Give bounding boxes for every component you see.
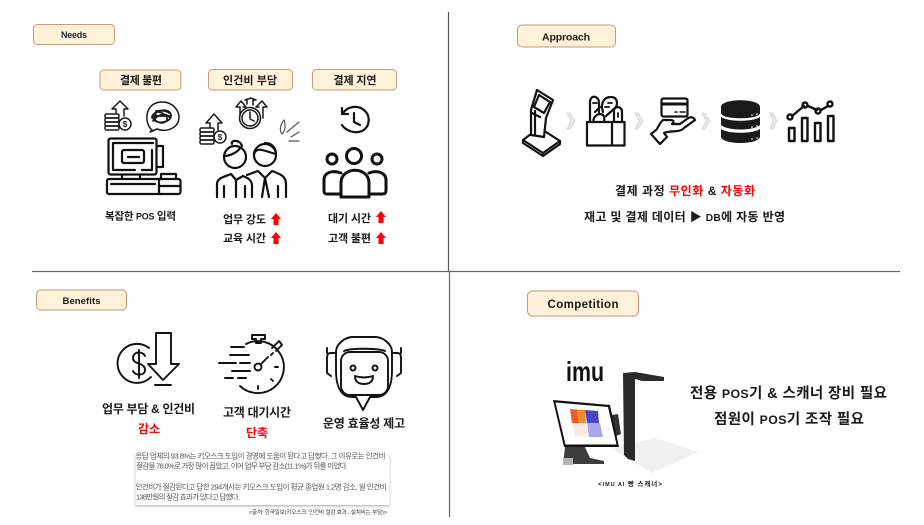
photo: IMU POS and scanner bbox=[553, 372, 699, 473]
label: payment inconvenience: 결제 불편 bbox=[120, 73, 162, 87]
icon: three people group bbox=[324, 148, 386, 197]
icon: stress lines bbox=[280, 120, 299, 141]
icon: speech bubble with scribble bbox=[147, 102, 179, 132]
text: data reflected in DB: 재고 및 결제 데이터 ▶ DB에 자동 반영 bbox=[584, 209, 785, 224]
label: payment inconvenience bbox=[100, 70, 181, 90]
text: training time up bbox=[223, 232, 281, 245]
callout: survey excerpt: 인건비가 절감된다고 답한 294개사는 키오스크 도입이 평균 종업원 1.2명 감소, 월 인건비 bbox=[136, 482, 386, 492]
heading: benefits: Benefits bbox=[62, 296, 100, 307]
icon: line and bar chart bbox=[788, 102, 834, 141]
text: waiting time up: 대기 시간 bbox=[328, 211, 371, 225]
icon: coins with up arrow bbox=[105, 101, 131, 130]
logo: IMU: imu bbox=[566, 356, 604, 387]
heading: needs: Needs bbox=[61, 30, 87, 40]
text: customer wait reduction bbox=[223, 404, 291, 440]
panel: needs bbox=[34, 24, 396, 245]
label: payment delay bbox=[312, 70, 396, 90]
callout: survey excerpt: 절감을 78.0%로 가장 많이 꼽았고, 이어 업무 부담 감소(11.1%)가 뒤를 이었다. bbox=[136, 460, 348, 470]
heading: needs bbox=[34, 24, 114, 44]
text: workload and labor cost reduction: 감소 bbox=[138, 422, 160, 436]
text: training time up: 교육 시간 bbox=[223, 232, 266, 245]
text: customer complaints up bbox=[328, 232, 386, 245]
text: staff operation required: 점원이 POS기 조작 필요 bbox=[714, 411, 864, 428]
heading: competition: Competition bbox=[548, 299, 618, 311]
text: complex POS input: 복잡한 POS 입력 bbox=[105, 210, 176, 222]
label: labor cost burden bbox=[208, 70, 292, 90]
text: customer wait reduction: 단축 bbox=[246, 426, 268, 440]
icon: two staff members bbox=[217, 141, 286, 197]
text: workload up bbox=[223, 213, 281, 226]
icon: stopwatch bbox=[219, 335, 284, 393]
label: labor cost burden: 인건비 부담 bbox=[223, 74, 277, 87]
panel: benefits bbox=[36, 290, 405, 516]
icon: grocery bag bbox=[587, 97, 624, 146]
text: customer wait reduction: 고객 대기시간 bbox=[223, 404, 291, 420]
text: automation of payment: 결제 과정 무인화 & 자동화 bbox=[615, 183, 755, 198]
heading: competition bbox=[528, 291, 638, 316]
icon: card over hand bbox=[651, 98, 695, 144]
callout: survey excerpt: 응답 업체의 93.8%는 키오스크 도입이 경영에 도움이 된다고 답했다. 그 이유로는 인건비 bbox=[136, 450, 386, 460]
text: workload and labor cost reduction: 업무 부담 & 인건비 bbox=[102, 402, 195, 416]
icon: kiosk bbox=[523, 90, 560, 156]
icon: robot chat bbox=[327, 337, 401, 410]
icon: coins with up arrow 2: $ bbox=[218, 133, 223, 142]
icon: coins with up arrow: $ bbox=[123, 120, 128, 129]
text: customer complaints up: 고객 불편 bbox=[328, 232, 371, 245]
text: waiting time up bbox=[328, 211, 386, 225]
heading: approach bbox=[518, 25, 616, 47]
icon: POS terminal bbox=[107, 138, 180, 194]
callout: survey excerpt: 138만원의 절감 효과가 있다고 답했다. bbox=[136, 492, 240, 502]
icon: cost down bbox=[118, 333, 179, 385]
caption: IMU AI bread scanner: <IMU AI 빵 스캐너> bbox=[598, 479, 662, 488]
panel: competition bbox=[528, 291, 887, 488]
text: operational efficiency: 운영 효율성 제고 bbox=[323, 416, 405, 430]
arrows: process chevrons bbox=[567, 113, 777, 129]
text: dedicated equipment required: 전용 POS기 & 스캐너 장비 필요 bbox=[690, 385, 887, 402]
icon: coins with up arrow 2 bbox=[200, 114, 226, 144]
text: workload up: 업무 강도 bbox=[223, 213, 266, 226]
icon: database bbox=[721, 100, 760, 143]
callout: survey excerpt bbox=[125, 446, 400, 505]
label: payment delay: 결제 지연 bbox=[334, 73, 376, 87]
panel: approach bbox=[518, 25, 834, 224]
text: workload and labor cost reduction bbox=[102, 402, 195, 436]
heading: approach: Approach bbox=[542, 32, 590, 44]
icon: history clock bbox=[342, 107, 369, 132]
heading: benefits bbox=[36, 290, 126, 310]
text: source note: <출처: 한국일보(키오스크, 인건비 절감 효과...설치비는 부담)> bbox=[249, 508, 387, 516]
icon: clock with arrows bbox=[236, 98, 267, 128]
